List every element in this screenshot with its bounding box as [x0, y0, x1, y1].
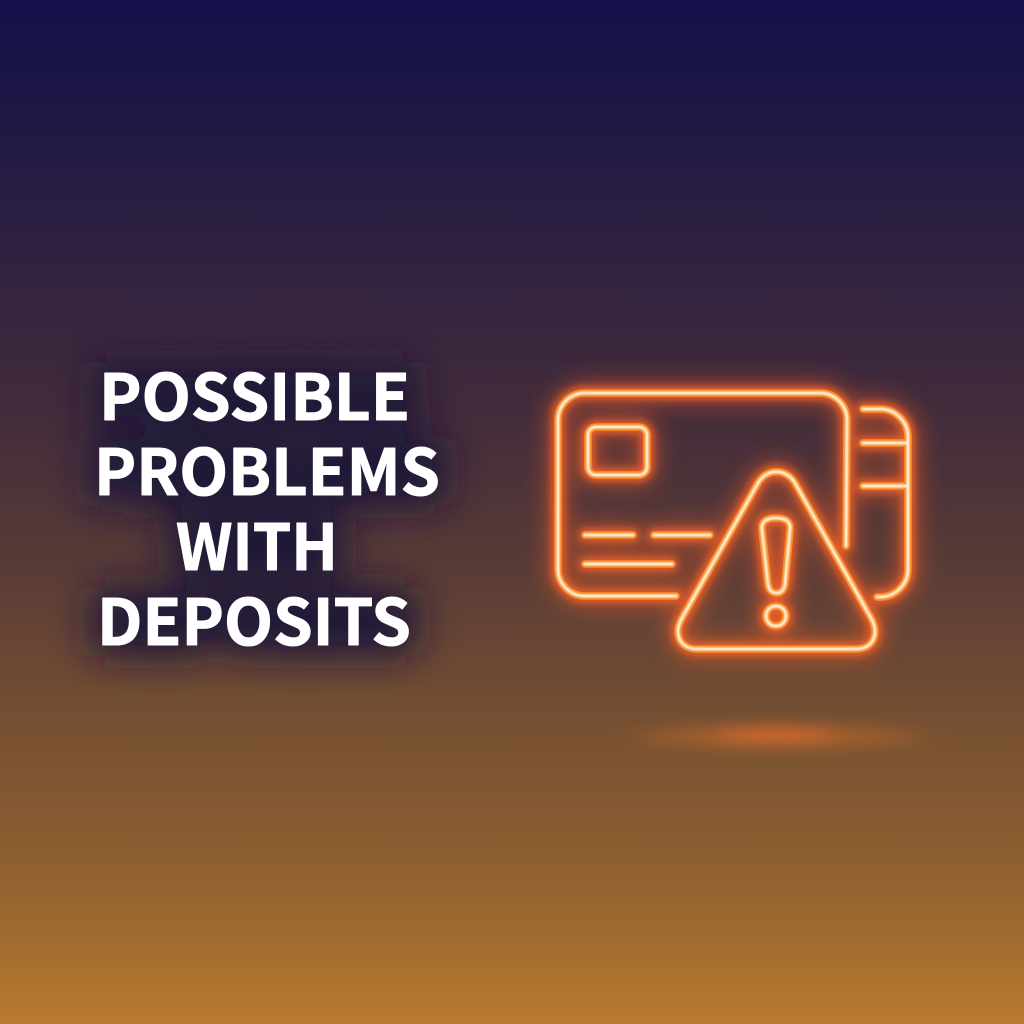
- floor glow reflection: [640, 725, 920, 749]
- title dark halo: POSSIBLE: [99, 347, 410, 439]
- title: Possible Problems with Deposits: [94, 347, 440, 664]
- title dark halo: WITH: [176, 497, 338, 589]
- title dark halo: DEPOSITS: [97, 572, 411, 664]
- icon: neon credit card with warning triangle: [558, 393, 908, 649]
- title text: WITH: [176, 497, 338, 589]
- title text: DEPOSITS: [97, 572, 411, 664]
- title text: PROBLEMS: [94, 422, 440, 514]
- title dark halo: PROBLEMS: [94, 422, 440, 514]
- title text: [94, 347, 440, 664]
- title text: POSSIBLE: [99, 347, 410, 439]
- title dark halo: [94, 347, 440, 664]
